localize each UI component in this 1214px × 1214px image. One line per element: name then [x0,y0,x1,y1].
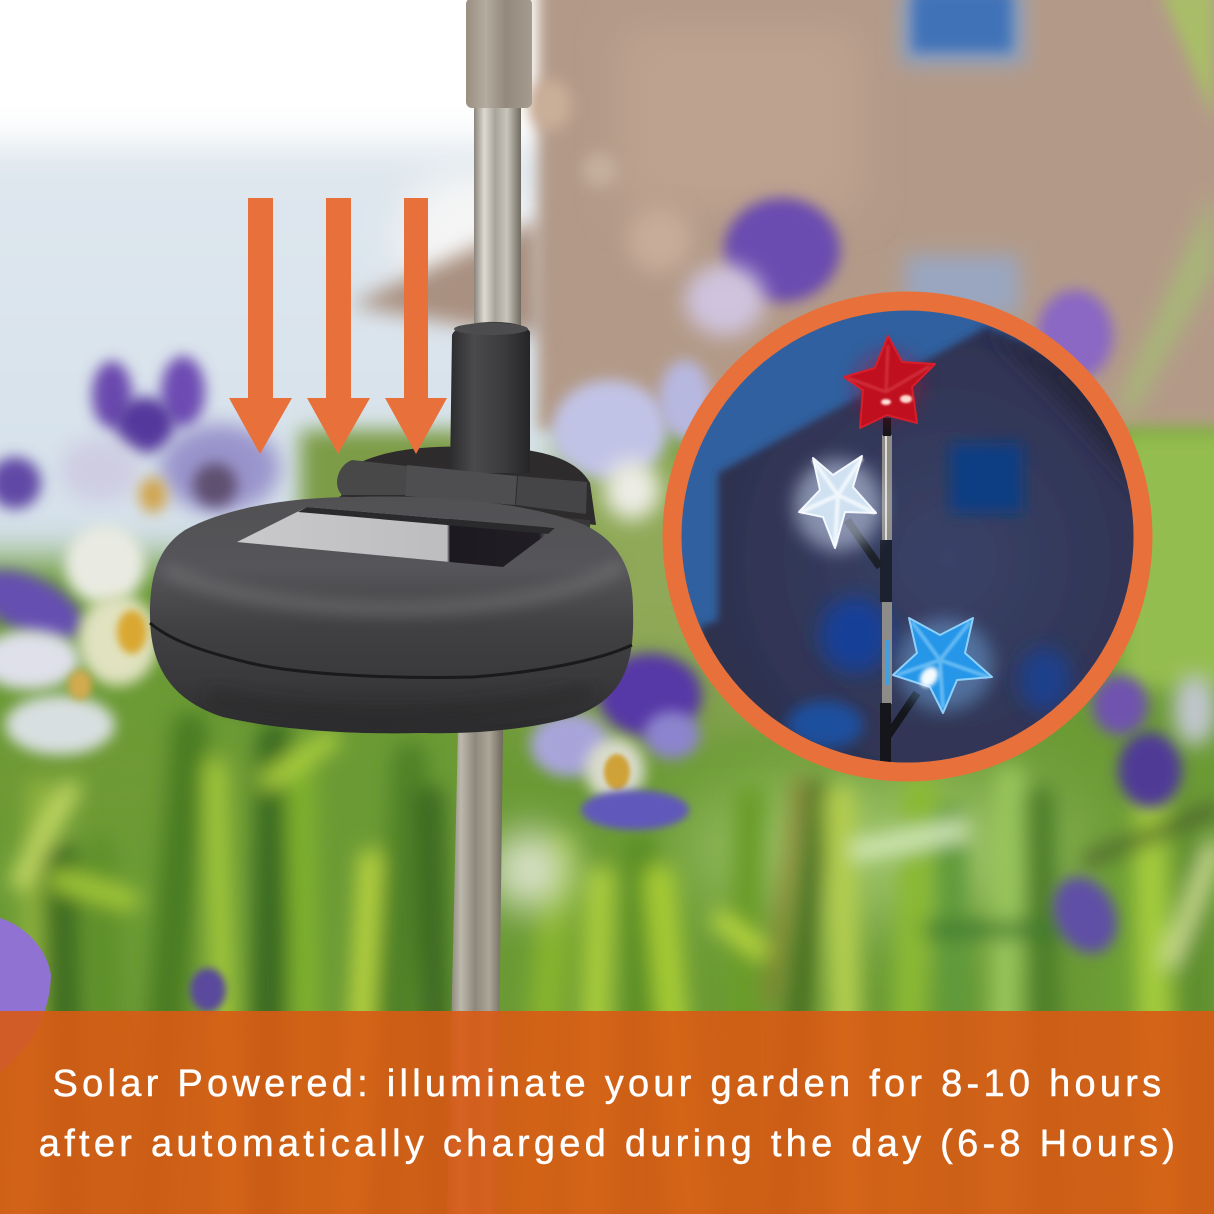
solar lamp head [150,322,633,733]
foreground purple petal [0,918,51,1072]
grass blades [0,708,1214,1011]
mount disc behind hinge [340,447,596,525]
arrows pointing down to solar panel [229,198,447,454]
caption text: after automatically charged during the day (6-8 Hours) [39,1123,1179,1165]
pole: upper and lower [447,0,532,1214]
caption text: Solar Powered: illuminate your garden for 8-10 hours [53,1063,1165,1105]
solar panel [237,507,555,567]
stake rod and branches [847,418,917,765]
background flowers [0,198,1214,1012]
caption band [0,1011,1214,1214]
red star [844,336,935,428]
inset circle: lit star stake at night [660,290,1160,790]
hinge [337,460,407,495]
caption text [39,1063,1179,1165]
collar [450,322,530,473]
lamp body [150,496,633,733]
blue star [893,618,992,713]
white star [799,456,876,548]
